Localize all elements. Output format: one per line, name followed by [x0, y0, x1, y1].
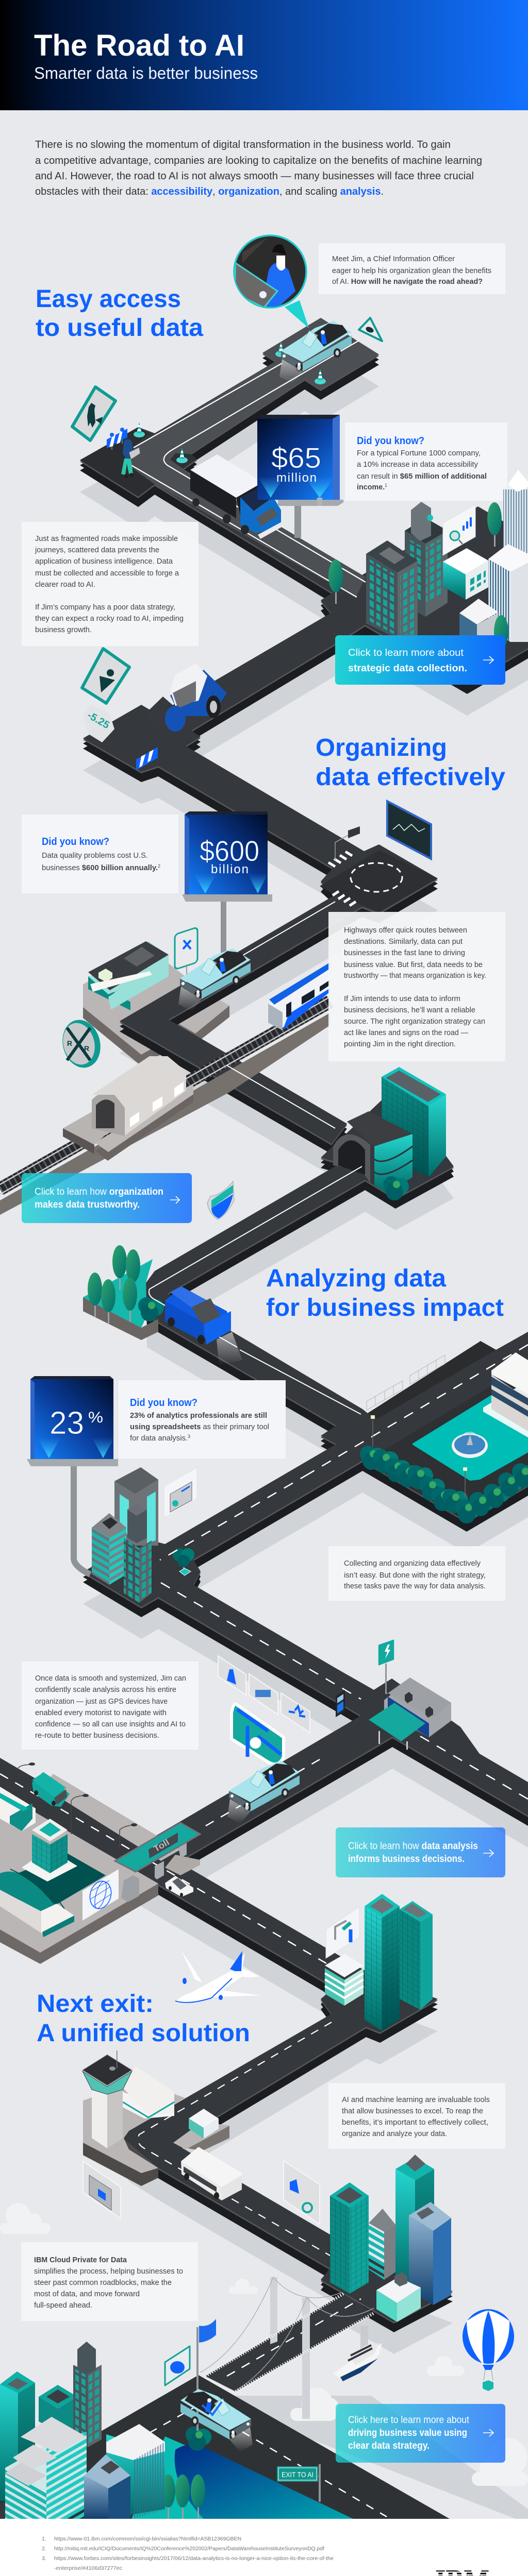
teal tall tower back [395, 2155, 434, 2287]
gray teal tower [369, 2209, 395, 2280]
footnotes: 2. [42, 2546, 46, 2552]
intro paragraph: a competitive advantage, companies are looking to capitalize on the benefits of machine learning [35, 155, 482, 166]
road dashes: right exit [420, 1736, 528, 1799]
tree [494, 615, 508, 659]
did you know one: income. [357, 483, 385, 492]
airport hangar [123, 2066, 174, 2119]
text: once data is smooth: confidently scale analysis across his entire [35, 1685, 176, 1694]
text: AI and machine learning: that allow businesses to excel. To reap the [342, 2107, 483, 2115]
intro paragraph: There is no slowing the momentum of digital transformation in the business world. To gain [35, 139, 451, 150]
right cloud [472, 2438, 528, 2486]
road dashes: transit road [0, 1774, 330, 1965]
blue SUV [165, 1286, 242, 1365]
sign: charging [378, 1639, 394, 1694]
clock tower [405, 502, 448, 617]
arrow [483, 656, 493, 664]
road surfaces [0, 318, 528, 2322]
white tower far right [503, 470, 528, 554]
text: collecting: isn’t easy. But done with the right strategy, [344, 1571, 486, 1580]
blue tower [409, 2202, 451, 2305]
intro paragraph: obstacles with their data: accessibility, organization, and scaling analysis. [35, 186, 384, 197]
button: organization: Click to learn how organization [35, 1187, 163, 1197]
footer [0, 2519, 528, 2576]
dark office building [366, 540, 418, 639]
flag [196, 2319, 216, 2431]
text: fragmented roads: business growth. [35, 625, 92, 634]
white low building [443, 548, 488, 600]
footnotes: -enterprise/#4106d37277ec [54, 2565, 122, 2571]
circular portrait of Jim [234, 235, 306, 308]
heading: next exit [37, 1990, 250, 2047]
road roller [145, 664, 227, 732]
left road dashes [160, 1473, 309, 1560]
heading: organizing: Organizing [316, 734, 447, 761]
did you know one: 1 [385, 483, 387, 488]
white car [165, 1876, 193, 1897]
road lane lines [130, 341, 366, 597]
text: highways: Highways offer quick routes between [344, 926, 467, 935]
skyscraper cluster [325, 1894, 433, 2031]
arrow [483, 2429, 493, 2436]
text: AI and machine learning: organize and analyze your data. [342, 2129, 447, 2138]
text: fragmented roads: journeys, scattered data prevents the [35, 546, 159, 554]
did you know one: a 10% increase in data accessibility [357, 460, 478, 469]
small office [189, 2109, 219, 2139]
button: data analysis [336, 1827, 505, 1877]
billboard: $65 million [257, 415, 343, 538]
did you know one: For a typical Fortune 1000 company, [357, 449, 481, 457]
road line: corner to car [149, 1289, 361, 1414]
traffic light pole [335, 826, 360, 860]
tree at road end [328, 560, 343, 604]
title: The Road to AI [34, 29, 244, 62]
heading: analyzing [266, 1265, 504, 1321]
analysis buildings [92, 1467, 361, 1699]
panel: dashboard right [284, 2161, 320, 2224]
road centre line [222, 902, 335, 968]
suspension bridge [200, 2277, 374, 2419]
signpost: slippery road [359, 318, 382, 341]
white van [181, 2147, 242, 2200]
text: highways: If Jim intends to use data to inform [344, 994, 460, 1003]
billboard: $600 billion: $600 [200, 835, 259, 867]
shop building [88, 941, 169, 1010]
sign: railroad crossing: R [84, 1044, 89, 1053]
tree [173, 1548, 194, 1575]
text: highways: destinations. Similarly, data can put [344, 937, 463, 946]
teal tower [330, 2182, 369, 2294]
rail tunnel [63, 1056, 193, 1161]
truck [190, 454, 283, 539]
text: AI and machine learning: benefits, it’s important to effectively collect, [342, 2118, 488, 2127]
road barrier [107, 428, 127, 450]
bush and trees [186, 2427, 211, 2451]
final junction shadow [199, 2396, 528, 2519]
text: collecting: these tasks pave the way for data analysis. [344, 1582, 486, 1590]
button: strategic data collection [335, 635, 505, 685]
footnotes [42, 2536, 334, 2571]
text: fragmented roads: they can expect a rocky road to AI, impeding [35, 614, 184, 623]
road dashes: toll approach [202, 1759, 320, 1828]
did you know two: businesses $600 billion annually. [42, 863, 159, 872]
heading: organizing [316, 734, 505, 791]
heading: analyzing: Analyzing data [266, 1265, 446, 1292]
text: meet Jim: eager to help his organization glean the benefits [332, 266, 491, 275]
text: AI and machine learning: AI and machine learning are invaluable tools [342, 2095, 490, 2104]
GPS device [232, 1704, 284, 1764]
speech bubble tail [285, 300, 309, 328]
convertible car one [279, 321, 352, 384]
sign: no file [175, 927, 197, 976]
icon panels [218, 1656, 310, 1733]
final city platform [330, 2155, 451, 2322]
light teal building [376, 2272, 421, 2322]
teal van [32, 1772, 70, 1807]
left cloud [0, 2203, 51, 2234]
fountain plaza [309, 1341, 528, 1523]
final junction road [0, 2375, 450, 2519]
heading: organizing: data effectively [316, 764, 505, 791]
teal tower [0, 2371, 35, 2501]
heading: next exit: Next exit: [37, 1990, 154, 2018]
dark teal block [39, 2385, 77, 2432]
heading: next exit: A unified solution [37, 2020, 250, 2047]
kiosk [336, 1690, 345, 1717]
tall tower [73, 2342, 102, 2447]
button: clear data strategy: driving business value using [348, 2428, 467, 2438]
left skyline [0, 2342, 165, 2519]
road side thickness [0, 323, 528, 2327]
text: AI and machine learning [328, 2083, 505, 2149]
railway tracks [0, 997, 330, 1215]
billboard: $65 million: $65 [271, 442, 321, 474]
did you know three: 23% of analytics professionals are still [130, 1411, 267, 1420]
arrow [483, 1850, 493, 1857]
glass building [106, 2424, 165, 2519]
glass teal building [374, 1134, 412, 1193]
sign: exit to AI: EXIT TO AI [282, 2470, 314, 2479]
airplane [175, 1951, 260, 2004]
icon: cones on first platform [134, 342, 326, 463]
footnotes: 1. [42, 2536, 46, 2542]
lower road dashes [161, 1583, 361, 1699]
fountain [452, 1432, 488, 1458]
roundabout and crosswalks [320, 850, 438, 912]
convertible car four [227, 1761, 300, 1824]
pond [175, 2445, 353, 2519]
did you know three: Did you know? [130, 1397, 197, 1409]
footnotes: http://mitiq.mit.edu/ICIQ/Documents/IQ%20Conference%202002/Papers/DataWarehouseInstituteSurveyonDQ.pdf [54, 2546, 324, 2552]
road tunnel [333, 1111, 412, 1183]
sign: railroad crossing: R [67, 1039, 72, 1047]
fence [367, 1355, 445, 1410]
button: data analysis: informs business decisions. [348, 1854, 465, 1865]
did you know one [345, 422, 507, 501]
text: highways: act like lanes and signs on the road — [344, 1028, 468, 1037]
yacht [333, 2343, 382, 2381]
white stepped building [5, 2417, 87, 2519]
sign: exit to AI [277, 2464, 321, 2502]
text: meet Jim [319, 243, 505, 294]
subtitle: Smarter data is better business [34, 64, 258, 82]
toll gate: Toll [152, 1837, 171, 1854]
text: highways: business value. But first, data needs to be [344, 960, 483, 969]
text: fragmented roads: clearer road to AI. [35, 580, 95, 589]
did you know two: Data quality problems cost U.S. [42, 851, 148, 860]
did you know three: 3 [188, 1434, 190, 1439]
button: clear data strategy: clear data strategy. [348, 2441, 430, 2451]
text: once data is smooth: re-route to better business decisions. [35, 1731, 159, 1740]
footnotes: https://www.forbes.com/sites/forbesinsights/2017/06/12/data-analytics-is-no-longer-a-nice-option-its-the-core-of-the [54, 2555, 334, 2562]
button: clear data strategy [336, 2404, 505, 2463]
billboard: 23% [27, 1376, 118, 1574]
rough road surface [80, 318, 379, 598]
sign: flow panel [326, 1907, 359, 1958]
text: once data is smooth: confidence — so all can use insights and AI to [35, 1720, 186, 1728]
charging station [369, 1677, 451, 1750]
billboard: 23%: % [88, 1409, 103, 1426]
billboard: $600 billion: billion [211, 862, 249, 876]
did you know three: for data analysis. [130, 1434, 188, 1443]
button: organization [22, 1173, 192, 1223]
gray tower [92, 1513, 126, 1585]
white road line after tunnel [150, 1166, 362, 1289]
heading: easy access: to useful data [36, 314, 203, 342]
train [268, 962, 330, 1030]
road centre line: below tracks [227, 1065, 335, 1128]
bushes [383, 1176, 409, 1200]
hedge bushes [360, 1446, 528, 1523]
text: once data is smooth: organization — just as GPS devices have [35, 1697, 168, 1706]
city buildings [328, 470, 528, 659]
button: strategic data collection: strategic data collection. [348, 663, 467, 674]
text: fragmented roads: must be collected and accessible to forge a [35, 569, 179, 578]
panel: dashboard left [83, 2161, 121, 2218]
sign: railroad crossing [58, 1016, 105, 1072]
tree [487, 502, 502, 547]
sign: search chart [443, 505, 475, 555]
toll gate [115, 1823, 200, 1902]
airport platform [83, 2081, 229, 2186]
text: fragmented roads: If Jim’s company has a poor data strategy, [35, 603, 175, 612]
did you know two [22, 815, 178, 893]
office tower [124, 1503, 152, 1603]
street lamps [373, 1419, 465, 1498]
sign: worker [72, 387, 116, 440]
text: fragmented roads: application of business intelligence. Data [35, 557, 173, 566]
mid clouds [229, 2279, 465, 2421]
sign: report panel [164, 1467, 197, 1518]
header banner [0, 0, 528, 110]
did you know three: using spreadsheets as their primary tool [130, 1422, 269, 1431]
did you know one: can result in $65 million of additional [357, 472, 487, 481]
beige platform under shop [83, 958, 229, 1066]
heading: easy access [36, 285, 203, 342]
road shadow [0, 350, 528, 2354]
text: IBM Cloud Private [21, 2242, 198, 2321]
hangar [0, 1869, 74, 1937]
street lamps [18, 1765, 133, 1850]
text: IBM Cloud Private: simplifies the process, helping businesses to [34, 2267, 183, 2276]
Jim arms up [202, 2402, 222, 2415]
lamp heads [29, 1762, 137, 1826]
dark teal tower [400, 1901, 433, 2010]
sign: grade hexagon: -5.25 [86, 709, 111, 731]
footnotes: 3. [42, 2555, 46, 2562]
did you know two: 2 [158, 863, 160, 869]
text: meet Jim: Meet Jim, a Chief Information Officer [332, 255, 455, 263]
text: fragmented roads [22, 522, 199, 646]
text: highways: source. The right organization strategy can [344, 1017, 485, 1026]
road dashes [309, 1345, 528, 1473]
road monitor sign [387, 801, 431, 859]
arrow [170, 1196, 179, 1204]
tall back building [114, 1467, 158, 1546]
intro paragraph [35, 139, 482, 197]
text: fragmented roads: Just as fragmented roads make impossible [35, 534, 178, 543]
did you know one: Did you know? [357, 435, 424, 447]
beige transit platform [0, 1774, 200, 1964]
billboard: $600 billion [182, 811, 272, 953]
white tower [32, 1819, 68, 1873]
control tower [82, 2050, 132, 2148]
park with trees [83, 1245, 164, 1340]
stacked white building [325, 1954, 364, 2006]
button: data analysis: Click to learn how data analysis [348, 1841, 478, 1852]
text: once data is smooth: Once data is smooth and systemized, Jim can [35, 1674, 186, 1683]
text: IBM Cloud Private: IBM Cloud Private for Data [34, 2256, 127, 2264]
sign: cloud data [165, 2346, 190, 2385]
text: highways: business decisions, he’ll want a reliable [344, 1006, 475, 1014]
lamp lights [371, 1415, 467, 1471]
billboard: $65 million: million [276, 471, 317, 485]
small white office [459, 599, 498, 639]
hot air balloon [463, 2309, 514, 2391]
did you know three [119, 1380, 286, 1459]
blue building [84, 2454, 130, 2519]
surveyor figure [121, 439, 140, 478]
teal buildings and road tunnel [333, 1067, 446, 1200]
sign: grade hexagon [83, 705, 114, 742]
heading: analyzing: for business impact [266, 1294, 504, 1321]
text: meet Jim: of AI. How will he navigate the road ahead? [332, 277, 483, 286]
footnotes: https://www-01.ibm.com/common/ssi/cgi-bin/ssialias?htmlfid=ASB12369GBEN [54, 2536, 241, 2542]
barrier two [136, 747, 158, 770]
text: highways: trustworthy — that means organization is key. [344, 971, 486, 980]
text: highways [328, 912, 505, 1061]
tall teal tower [365, 1894, 400, 2031]
left white building [0, 1787, 36, 1831]
celebrating Jim car [180, 2389, 253, 2452]
billboard: 23%: 23 [50, 1405, 84, 1441]
convertible car two [178, 948, 251, 1011]
button: strategic data collection: Click to learn more about [348, 648, 464, 658]
did you know two: Did you know? [42, 836, 109, 848]
sign: steep road [82, 649, 129, 703]
text: highways: businesses in the fast lane to driving [344, 948, 465, 957]
text: IBM Cloud Private: steer past common roadblocks, make the [34, 2278, 172, 2287]
white tall building [488, 544, 528, 642]
text: IBM Cloud Private: most of data, and move forward [34, 2290, 140, 2298]
button: clear data strategy: Click here to learn more about [348, 2415, 470, 2426]
sign: globe [82, 1869, 119, 1921]
sign: highway shield [207, 1181, 234, 1219]
text: collecting [328, 1546, 505, 1601]
text: IBM Cloud Private: full-speed ahead. [34, 2301, 92, 2310]
heading: easy access: Easy access [36, 285, 181, 313]
road dashes: airport road [138, 2022, 332, 2256]
text: collecting: Collecting and organizing data effectively [344, 1559, 481, 1568]
text: once data is smooth [22, 1662, 199, 1750]
tall teal building [382, 1067, 446, 1177]
white office building [483, 1352, 528, 1437]
text: highways: pointing Jim in the right direction. [344, 1040, 456, 1048]
intro paragraph: and AI. However, the road to AI is not always smooth — many businesses will face three crucial [35, 171, 474, 182]
button: organization: makes data trustworthy. [35, 1199, 140, 1210]
text: once data is smooth: enabled every motorist to navigate with [35, 1708, 167, 1717]
